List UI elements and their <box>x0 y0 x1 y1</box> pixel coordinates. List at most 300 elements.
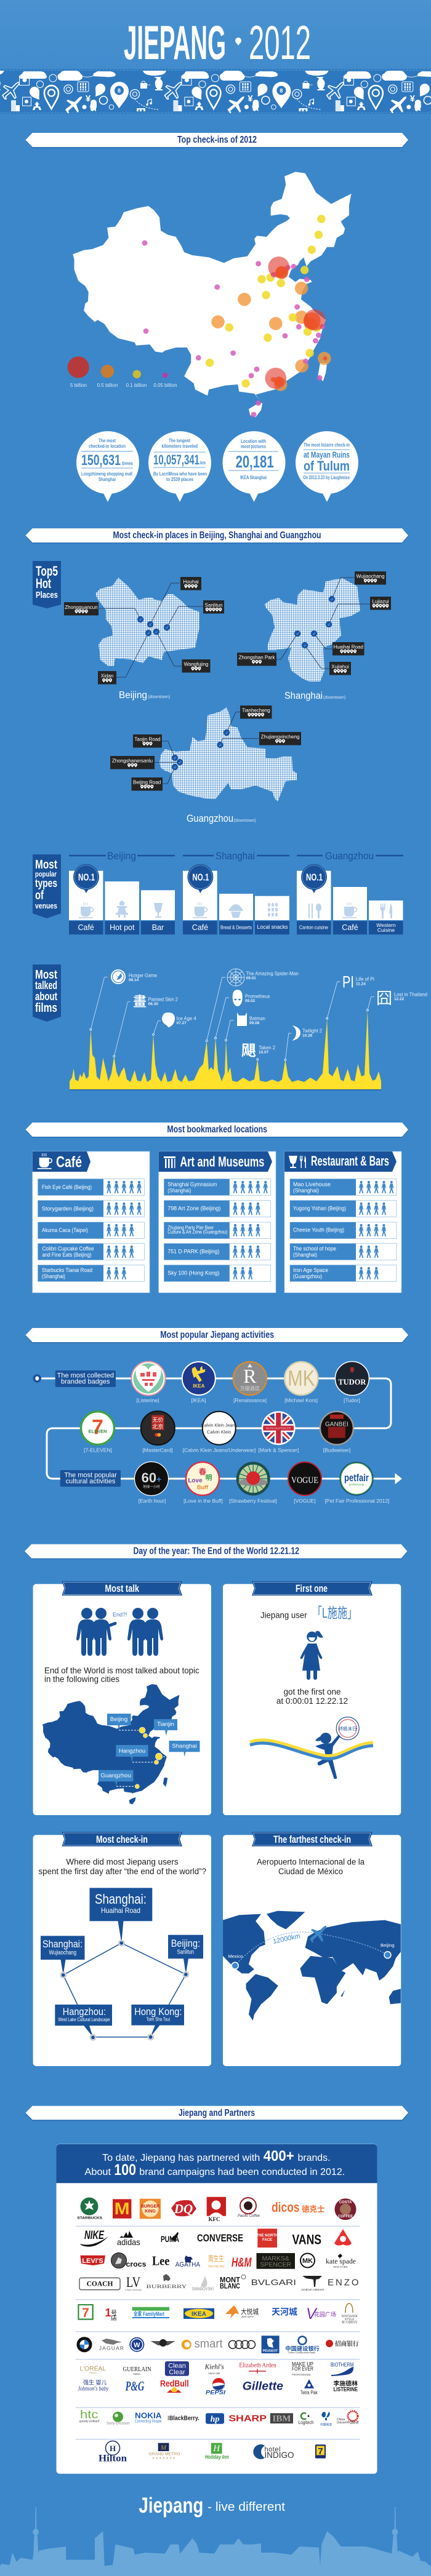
panel: Café: (Shanghai) <box>42 1273 65 1280</box>
logos: fashion row three: LOUIS VUITTON <box>125 2289 142 2291</box>
logos: technology: SHARP <box>228 2414 267 2424</box>
film: Lost in Thailand: 囧 <box>376 989 392 1008</box>
text: question: Where did most Jiepang users <box>66 1858 179 1867</box>
header tab: Café: Café <box>56 1154 82 1171</box>
film: Hunger Game: 06.14 <box>129 978 139 982</box>
badge: 7-Eleven: 7 <box>92 1416 103 1439</box>
label: Zhongshanersanlu <box>110 756 155 769</box>
badge captions: [VOGUE] <box>294 1498 316 1504</box>
callout: most checked-in location: The most <box>99 437 116 443</box>
logos: beauty: Clean <box>168 2362 186 2369</box>
film: Hunger Game <box>111 969 157 984</box>
panel: Restaurant & Bars: The school of hope <box>293 1246 336 1252</box>
panel: Café: Akuma Caca (Taipei) <box>42 1227 88 1234</box>
logos: retail: STYLE <box>345 2318 354 2321</box>
badge: Earth hour <box>134 1461 169 1496</box>
label: Tianjin <box>154 1719 177 1736</box>
panel: Art and Museums: 798 Art Zone (Beijing) <box>167 1206 220 1212</box>
film: Ice Age 4 <box>162 1012 196 1027</box>
logos: hotels <box>99 2441 326 2464</box>
label: cultural activities: cultural activities <box>66 1478 116 1485</box>
map: Beijing downtown <box>95 578 203 677</box>
box: Shanghai Wujiaochang <box>41 1936 85 1960</box>
logos: auto and banks: smart <box>195 2338 223 2351</box>
logos: beauty: SINCE 1851 <box>208 2372 220 2375</box>
icon: coffee cup <box>193 902 207 918</box>
film: Ice Age 4: Ice Age 4 <box>177 1016 196 1022</box>
text: most talked topic <box>44 1666 199 1684</box>
city name: Guangzhou: (downtown) <box>234 819 256 823</box>
logos: fashion row one: THE NORTH <box>256 2234 278 2238</box>
label: Zhongshan Park: Zhongshan Park <box>239 654 275 661</box>
icon: runner with ribbon <box>250 1717 373 1779</box>
chart: film mentions over time <box>70 977 381 1090</box>
column group: Beijing venues: Café <box>78 923 94 932</box>
callout: most bizarre check-in: On 2012.3.23 by Laughmiss <box>303 474 350 480</box>
label: Wangfujing <box>182 659 211 673</box>
logos: hotels: 7 <box>318 2446 323 2457</box>
badge captions: [Budweiser] <box>323 1447 350 1453</box>
panel: Restaurant & Bars: Mao Livehouse <box>293 1181 331 1188</box>
badge: Vogue: VOGUE <box>291 1476 318 1485</box>
film: Lost in Thailand: 12.22 <box>394 997 405 1001</box>
panel: Restaurant & Bars: (Shanghai) <box>293 1252 317 1258</box>
label: Lujiazui <box>370 597 391 610</box>
logos: retail: 天河城 <box>272 2307 297 2316</box>
badge: Shanghai No.1 <box>187 864 213 893</box>
header tab: Art and Museums <box>159 1151 272 1172</box>
label: Sanlitun: Sanlitun <box>205 603 222 608</box>
logos: beauty: GUERLAIN <box>123 2366 151 2373</box>
logos: technology: Sony Ericsson <box>107 2422 130 2426</box>
arrow: timeline path <box>33 1374 402 1484</box>
icon: coffee cup <box>342 902 357 918</box>
city name: Beijing: (downtown) <box>148 695 170 699</box>
badge captions: [IKEA] <box>191 1397 206 1403</box>
label: Taojin Road: Taojin Road <box>134 737 161 742</box>
header tab: Café <box>33 1151 91 1172</box>
text: partner summary: 100 <box>114 2161 136 2179</box>
logos: food and drink: M <box>115 2199 130 2218</box>
logos: consumer goods: Tetra Pak <box>300 2390 318 2395</box>
header tab: Art and Museums: Art and Museums <box>180 1154 264 1170</box>
badge: Pet Fair: professional <box>349 1483 364 1486</box>
logos: fashion row one: PUMA <box>161 2234 179 2244</box>
ribbon: most popular types of venues: of <box>35 889 44 902</box>
label: Shanghai: Shanghai <box>172 1743 197 1749</box>
ribbon title: Most check-in: Most check-in <box>96 1834 148 1845</box>
ribbon: top5 hot places: Hot <box>36 576 51 591</box>
logos: retail: 全家 FamilyMart <box>134 2310 164 2317</box>
column group: Guangzhou venues: Canton cuisine <box>299 924 328 930</box>
callout: most pictures: Location with <box>241 438 266 444</box>
label: Beijing Road <box>132 777 163 791</box>
logos: hotels: H <box>212 2444 220 2454</box>
badge captions: [Calvin Klein Jeans/Underwear] <box>183 1447 256 1453</box>
label: Huaihai Road: Huaihai Road <box>333 645 363 650</box>
logos: fashion row one: NIKE <box>84 2229 105 2242</box>
icon: chopsticks and spoon <box>308 904 321 918</box>
logos: fashion row one <box>80 2228 352 2248</box>
yellow dots: 0.1 billion <box>206 215 326 388</box>
logos: technology: Connecting People <box>135 2420 162 2423</box>
ribbon title: farthest check-in <box>252 1832 373 1847</box>
icon: talking people <box>76 1608 163 1656</box>
ribbon: most talked about films: talked <box>35 979 57 992</box>
logos: fashion row three: LV <box>126 2275 140 2290</box>
badge: Pet Fair: petfair <box>344 1472 369 1484</box>
logos: technology: NOKIA <box>135 2411 162 2420</box>
label: Lujiazui: Lujiazui <box>372 599 389 604</box>
decorative icon band <box>0 69 431 114</box>
callout: longest distance: 10,057,341 <box>153 452 199 467</box>
box: Shanghai Wujiaochang: Wujiaochang <box>49 1950 76 1957</box>
box: Hong Kong Tsim Sha Tsui: Hong Kong: <box>134 2006 182 2017</box>
logos: auto and banks: 招商银行 <box>335 2340 359 2348</box>
film: Twilight 2 <box>292 1025 322 1041</box>
panel: partners <box>57 2144 377 2474</box>
text: most talked topic: in the following cities <box>44 1674 119 1684</box>
logos: beauty: Clear <box>169 2369 185 2376</box>
logos: beauty <box>80 2361 354 2376</box>
badge captions: [Listerine] <box>137 1397 159 1403</box>
label: Beijing: Beijing <box>110 1716 127 1723</box>
ribbon: most talked about films: films <box>35 1001 57 1015</box>
badge: MasterCard <box>141 1411 175 1445</box>
column group: Beijing venues <box>69 850 175 934</box>
badge: Love in the Buff: Love <box>188 1477 203 1484</box>
box: Shanghai Wujiaochang: Shanghai: <box>42 1938 83 1950</box>
logos: hotels: ⁕ ⁕ ⁕ ⁕ ⁕ ⁕ ⁕ <box>152 2457 175 2460</box>
legend: bubble sizes: 0.05 billion <box>153 383 177 388</box>
label: Xidan <box>98 671 116 684</box>
logos: retail: 大悦城 <box>241 2307 259 2316</box>
logos: fashion row two: Lee <box>152 2254 169 2268</box>
text: Jiepang user name <box>260 1605 357 1621</box>
logos: beauty: BIOTHERM <box>331 2362 354 2369</box>
heading: most check-in places <box>26 528 408 544</box>
ribbon title: First one <box>252 1581 373 1596</box>
callout: most checked-in location: 150,631 <box>81 452 121 469</box>
map: China check-ins <box>73 172 351 417</box>
city name: Guangzhou: Guangzhou <box>187 813 233 824</box>
callout: most checked-in location <box>76 431 139 502</box>
logos: fashion row three: BVLGARI <box>251 2278 296 2287</box>
footer logo: Jiepang <box>139 2494 203 2518</box>
panel: Restaurant & Bars: Yugong Yishan (Beijing) <box>293 1206 346 1212</box>
heading: day of the year <box>25 1544 408 1559</box>
label: Hangzhou <box>116 1745 148 1762</box>
heading: Jiepang and partners <box>26 2106 408 2121</box>
header tab: Restaurant & Bars: Restaurant & Bars <box>311 1153 389 1169</box>
film: Taken 2 <box>241 1043 275 1059</box>
logos: beauty: L'ORÉAL <box>80 2364 106 2372</box>
logos: fashion row two: Chow Sang Sang <box>208 2265 224 2268</box>
title: 2012 <box>249 15 311 70</box>
label: Tianhecheng <box>240 706 272 718</box>
skyline <box>0 2507 431 2576</box>
panel: most talk <box>33 1581 211 1815</box>
logos: retail: V <box>306 2305 318 2323</box>
ribbon: top5 hot places: Places <box>36 590 58 600</box>
logos: hotels: Holiday Inn <box>205 2454 229 2460</box>
logos: food and drink: dicos <box>272 2200 300 2215</box>
label: Zhujiangxincheng <box>259 732 301 745</box>
column group: Guangzhou venues: Western <box>376 922 396 928</box>
badge: Calvin Klein: Calvin Klein Jeans <box>201 1424 237 1428</box>
label: Zhongguancun <box>64 602 99 615</box>
text: first time <box>276 1687 348 1706</box>
logos: retail: 店 <box>111 2314 117 2322</box>
heading: top check-ins <box>26 133 408 148</box>
label: branded badges: The most collected <box>57 1372 114 1379</box>
film: Prometheus: 09.02 <box>245 999 256 1003</box>
icon: skewers <box>268 903 278 916</box>
panel: most talk: End?! <box>113 1612 127 1618</box>
logos: auto and banks <box>76 2335 359 2354</box>
logos: retail: 号 <box>111 2310 117 2317</box>
ribbon: top5 hot places <box>33 561 61 608</box>
logos: fashion row two: SPENCER <box>260 2261 291 2268</box>
badge: Love in the Buff <box>186 1462 219 1495</box>
callout: most bizarre check-in <box>296 431 358 502</box>
logos: beauty: MAKE UP <box>292 2361 313 2367</box>
film: Taken 2: Taken 2 <box>259 1044 275 1051</box>
column group: Shanghai venues: Café <box>192 923 208 932</box>
logos: fashion row three: MONT <box>220 2276 241 2284</box>
ribbon: most popular types of venues <box>33 854 61 918</box>
logos: retail: 7 <box>82 2306 89 2320</box>
label: Tianjin: Tianjin <box>157 1721 174 1728</box>
logos: fashion row one: VANS <box>292 2232 321 2247</box>
logos: auto and banks: China Construction Bank <box>288 2351 315 2354</box>
ribbon title: Most check-in <box>62 1832 182 1847</box>
film: Lost in Thailand: Lost in Thailand <box>394 991 427 997</box>
film: Painted Skin 2: 畫 <box>133 994 147 1009</box>
city name: Beijing <box>119 690 170 701</box>
logos: beauty: PROFESSIONAL <box>292 2373 312 2376</box>
text: Jiepang user name: 「L施施」 <box>312 1605 357 1621</box>
legend: bubble sizes: 0.1 billion <box>126 383 147 388</box>
logos: technology: 中国电信 <box>320 2422 332 2427</box>
legend: bubble sizes <box>68 357 177 388</box>
text: Jiepang user name: Jiepang user <box>260 1610 307 1620</box>
film: Taken 2: 10.07 <box>259 1051 269 1054</box>
logos: technology: ⁝BlackBerry. <box>167 2415 199 2422</box>
panel: Restaurant & Bars: (Shanghai) <box>293 1187 319 1194</box>
box: Beijing Sanlitun: Sanlitun <box>177 1949 194 1956</box>
column group: Beijing venues: Bar <box>152 923 164 932</box>
city name: Shanghai: (downtown) <box>323 696 345 700</box>
logos: fashion row two <box>80 2252 356 2270</box>
logos: fashion row three: BURBERRY <box>147 2283 187 2289</box>
callout: most bizarre check-in: at Mayan Ruins <box>304 450 350 459</box>
text: partner summary: 400+ <box>264 2148 294 2165</box>
callout: longest distance: to 2539 places <box>166 476 193 482</box>
callout: most pictures <box>223 431 286 502</box>
callout: most checked-in location: Longzhimeng shopping mall <box>81 471 132 477</box>
badge: Calvin Klein: Calvin Klein <box>207 1429 232 1435</box>
badge: Beijing No.1: NO.1 <box>78 873 95 883</box>
panel: Art and Museums: (Shanghai) <box>167 1187 191 1194</box>
column group: Shanghai venues: Local snacks <box>257 924 288 930</box>
box: Beijing Sanlitun: Beijing: <box>171 1938 200 1949</box>
film: Life of Pi: Life of Pi <box>356 976 374 982</box>
film: Batman: 09.08 <box>249 1021 260 1025</box>
box: Hangzhou West Lake <box>55 2005 112 2025</box>
footer logo <box>139 2494 285 2518</box>
column group: Guangzhou venues: Cuisine <box>377 927 395 933</box>
logos: fashion row two: LEVI'S <box>82 2257 103 2265</box>
ribbon: most talked about films: Most <box>35 968 57 982</box>
box: Beijing Sanlitun <box>168 1935 203 1958</box>
label: Guangzhou: Guangzhou <box>101 1773 131 1779</box>
logos: auto and banks: JAGUAR <box>99 2345 124 2351</box>
panel: Café: and Fine Eats (Beijing) <box>42 1252 91 1258</box>
panel: Café <box>33 1151 150 1293</box>
logos: food and drink <box>77 2197 356 2222</box>
logos: beauty: Elizabeth Arden <box>239 2362 276 2369</box>
label: cultural activities <box>60 1470 121 1487</box>
text: most talked topic: End of the World is most talked about topic <box>44 1666 199 1676</box>
badge: Love in the Buff: 春 <box>199 1467 206 1476</box>
logos: retail: XINTIANDI <box>341 2315 358 2318</box>
badge: Vogue <box>288 1462 321 1495</box>
badge captions: [Michael Kors] <box>284 1397 318 1403</box>
label: Houhai <box>180 577 201 590</box>
logos: fashion row three: SWAROVSKI <box>192 2287 214 2291</box>
badge captions: [Pet Fair Professional 2012] <box>325 1498 389 1504</box>
film: Batman <box>237 1012 265 1026</box>
column group: Guangzhou venues: Café <box>342 923 358 932</box>
text: first time: at 0:00:01 12.22.12 <box>276 1696 348 1706</box>
logos: fashion row one: adidas <box>117 2237 140 2247</box>
panel: Art and Museums: Shanghai Gymnasium <box>167 1181 217 1188</box>
label: branded badges: branded badges <box>61 1378 110 1385</box>
badge captions: [Tudor] <box>344 1397 360 1403</box>
ribbon: most talked about films: about <box>35 990 57 1003</box>
logos: beauty: PARIS <box>133 2372 140 2375</box>
callout: most pictures: IKEA Shanghai <box>240 474 267 480</box>
label: Wujiaochang: Wujiaochang <box>356 573 385 579</box>
label: Xidan: Xidan <box>101 673 113 679</box>
panel: Restaurant & Bars: (Guangzhou) <box>293 1273 322 1280</box>
label: Sanlitun <box>203 600 224 614</box>
badge: Earth hour: 60+ <box>142 1470 161 1485</box>
heading: top check-ins: Top check-ins of 2012 <box>177 135 257 145</box>
heading: most popular activities: Most popular Jiepang activities <box>160 1330 274 1340</box>
callout: most pictures: 20,181 <box>236 452 274 471</box>
ribbon title: Most talk: Most talk <box>105 1583 139 1594</box>
logos: fashion row two: MARKS& <box>262 2255 289 2262</box>
panel: Café: Storygarden (Beijing) <box>42 1206 94 1212</box>
film: The Amazing Spider-Man <box>227 969 299 986</box>
panel: Restaurant & Bars: Iron Age Space <box>293 1267 328 1274</box>
logos: hotels: Hilton <box>99 2454 127 2464</box>
box: Hangzhou West Lake: Hangzhou: <box>63 2006 106 2017</box>
logos: technology <box>79 2409 359 2427</box>
map: China cities talking <box>42 1684 199 1804</box>
logos: technology: China <box>337 2418 345 2422</box>
box: Hong Kong Tsim Sha Tsui <box>131 2005 184 2025</box>
panel: Art and Museums <box>159 1151 276 1293</box>
text: airport name <box>257 1858 365 1876</box>
badge: Guangzhou No.1: NO.1 <box>306 873 323 883</box>
label: Hangzhou: Hangzhou <box>119 1748 145 1755</box>
text: partner summary: About <box>85 2167 111 2177</box>
film: Batman: Batman <box>249 1015 265 1021</box>
callout: most checked-in location: Shanghai <box>99 476 116 482</box>
film: Painted Skin 2 <box>133 994 178 1009</box>
column group: Shanghai venues: Bread & Desserts <box>220 924 252 930</box>
logos: food and drink: DQ <box>174 2201 193 2216</box>
logos: retail: 1 <box>105 2307 111 2319</box>
badge: Renaissance <box>233 1362 267 1395</box>
heading: Jiepang and partners: Jiepang and Partners <box>179 2108 255 2118</box>
label: Tianhecheng: Tianhecheng <box>242 707 270 714</box>
logos: auto and banks: PEUGEOT <box>263 2350 278 2353</box>
logos: food and drink: STARBUCKS <box>77 2217 102 2220</box>
badge: Michael Kors <box>284 1362 318 1395</box>
map: world route <box>223 1911 401 2021</box>
logos: fashion row two: kate spade <box>326 2258 356 2265</box>
heading: most check-in places: Most check-in places in Beijing, Shanghai and Guangzhou <box>113 530 321 541</box>
film: Taken 2: 飓 <box>241 1043 256 1059</box>
header tab: Restaurant & Bars <box>284 1151 397 1172</box>
diagram: pentagon of places <box>41 1888 203 2041</box>
logos: technology: Logitech <box>298 2420 313 2425</box>
badge captions: [Strawberry Festival] <box>229 1498 277 1504</box>
icon: girl <box>300 1631 323 1680</box>
label: Zhongguancun: Zhongguancun <box>65 605 98 610</box>
film: Life of Pi: 11.24 <box>356 982 366 987</box>
icon: coffee cup <box>79 902 94 918</box>
text: first time: got the first one <box>283 1687 341 1696</box>
film: Painted Skin 2: 06.30 <box>148 1002 158 1006</box>
legend: bubble sizes: 0.5 billion <box>97 383 118 388</box>
icon: runner with ribbon: 终极末日 <box>339 1725 357 1731</box>
box: Hong Kong Tsim Sha Tsui: Tsim Sha Tsui <box>147 2017 170 2022</box>
panel: Art and Museums: 751 D·PARK (Beijing) <box>167 1248 219 1255</box>
logos: retail: 新天地时尚 <box>342 2320 357 2324</box>
panel: Restaurant & Bars: Cheese Youth (Beijing) <box>293 1227 344 1234</box>
film: The Amazing Spider-Man: 09.01 <box>246 976 256 980</box>
text: question: spent the first day after “the end of the world”? <box>38 1867 206 1876</box>
column group: Shanghai venues <box>183 850 289 934</box>
footer logo: - live different <box>207 2500 285 2514</box>
heading: most popular activities <box>26 1328 408 1343</box>
heading: most bookmarked locations <box>26 1123 408 1138</box>
box: Shanghai Huaihai Road: Shanghai: <box>95 1891 147 1907</box>
badge: IKEA: IKEA <box>193 1383 205 1389</box>
badge: MasterCard: 无价 <box>152 1417 163 1423</box>
film: Life of Pi: PI <box>342 973 354 992</box>
badge: Love in the Buff: Buff <box>197 1484 209 1490</box>
logos: fashion row three: COACH <box>87 2281 113 2288</box>
logos: food and drink: 德克士 <box>302 2204 325 2214</box>
badge captions: [7-ELEVEN] <box>84 1447 112 1453</box>
text: airport name: Aeropuerto Internacional de la <box>257 1858 365 1867</box>
badge captions <box>84 1397 389 1504</box>
badge: Renaissance: R <box>243 1365 257 1387</box>
callout: most checked-in location: checked-in location <box>89 443 126 449</box>
logos: hotels: H <box>110 2444 116 2453</box>
logos: consumer goods: Gillette <box>243 2380 283 2393</box>
logos: food and drink: COSTA <box>339 2201 352 2204</box>
label: cultural activities: The most popular <box>64 1472 117 1479</box>
badge: Tudor <box>335 1362 369 1395</box>
logos: fashion row three: GIORGIO ARMANI <box>301 2288 324 2291</box>
